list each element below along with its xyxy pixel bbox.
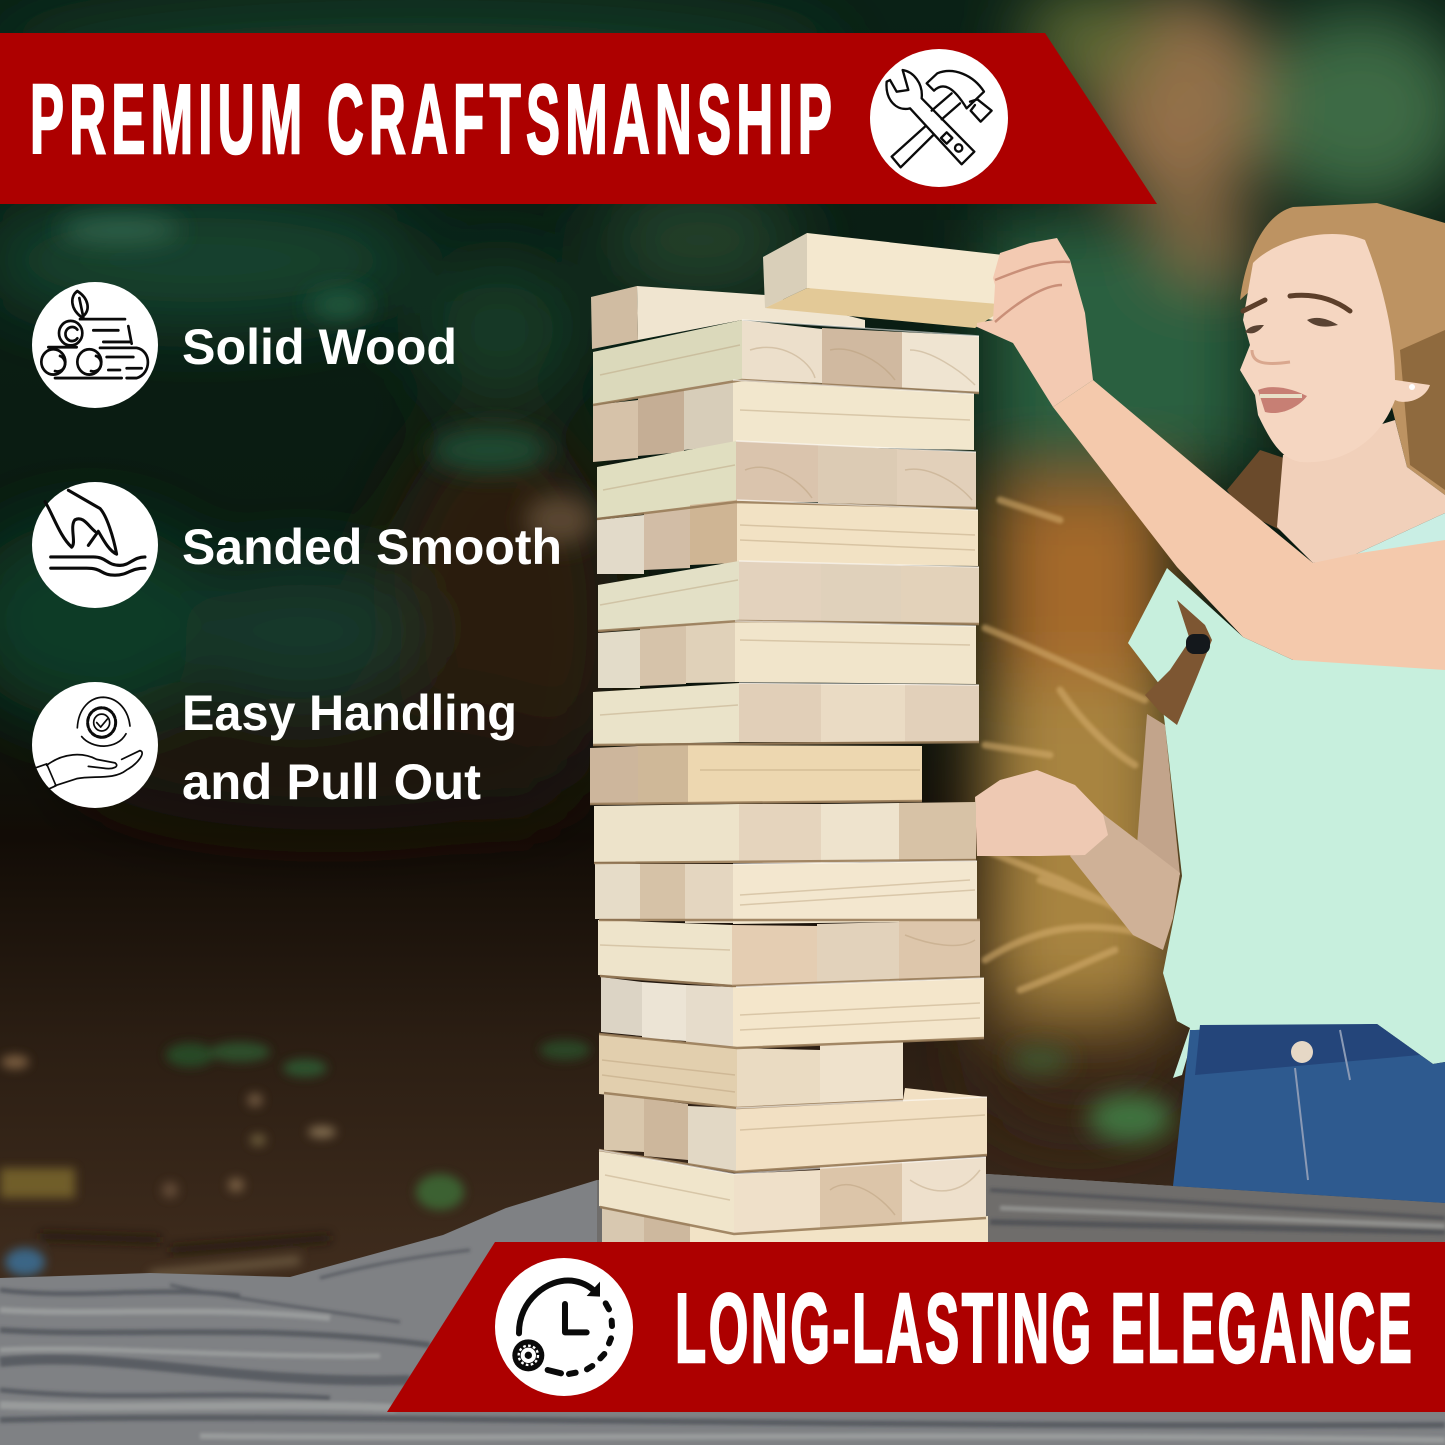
long hair xyxy=(1240,203,1445,495)
hair tie xyxy=(1186,634,1210,654)
bottom banner xyxy=(387,1242,1445,1412)
label: easy handling and pull out xyxy=(182,685,517,810)
icon: clock cycle xyxy=(495,1258,633,1396)
row 5 xyxy=(598,561,739,631)
rear arm xyxy=(1137,714,1180,875)
mint shirt xyxy=(1128,568,1445,1078)
top back block xyxy=(637,286,865,340)
girl xyxy=(975,203,1445,1203)
icon: hand with gear xyxy=(37,697,142,789)
title: PREMIUM CRAFTSMANSHIP xyxy=(30,64,832,174)
lower hand xyxy=(975,770,1108,856)
row 9 xyxy=(594,804,739,863)
row 8 xyxy=(590,746,638,804)
row 2 xyxy=(593,400,638,462)
label: easy handling and pull out: Easy Handling xyxy=(182,685,517,741)
held block xyxy=(763,233,1030,328)
wooden block tower xyxy=(590,233,1030,1245)
row 14 xyxy=(604,1092,644,1152)
row 13 xyxy=(599,1034,737,1108)
bottom title: LONG-LASTING ELEGANCE xyxy=(675,1273,1412,1383)
feature: solid wood xyxy=(32,282,457,408)
row 15 xyxy=(599,1150,734,1234)
row seams xyxy=(590,380,987,1234)
label: sanded smooth: Sanded Smooth xyxy=(182,519,562,575)
facial features xyxy=(1243,295,1415,413)
row 7 xyxy=(593,683,739,745)
icon: hand on surface xyxy=(45,490,145,575)
raised hand gripping block xyxy=(977,238,1093,407)
icon: tools xyxy=(870,49,1008,187)
row 16 xyxy=(602,1208,988,1245)
row 4 xyxy=(597,515,644,574)
row 12 xyxy=(601,977,642,1036)
jeans xyxy=(1173,1024,1445,1203)
lower forearm xyxy=(1070,814,1180,950)
row 1 xyxy=(593,320,742,405)
neck xyxy=(1277,420,1445,563)
label: easy handling and pull out: and Pull Out xyxy=(182,754,481,810)
top banner xyxy=(0,33,1157,204)
raised arm xyxy=(1053,380,1445,670)
feature: easy handling xyxy=(32,682,517,810)
face xyxy=(1240,234,1430,462)
braid xyxy=(1145,600,1212,725)
row 10 xyxy=(595,863,640,919)
wood grain xyxy=(600,345,985,1215)
row 11 xyxy=(598,920,732,985)
icon: logs xyxy=(41,291,148,378)
golden twigs xyxy=(985,500,1160,990)
wooden table xyxy=(0,1174,1445,1445)
row 3 xyxy=(597,441,736,518)
ground specks xyxy=(0,1040,590,1276)
feature: sanded smooth xyxy=(32,482,562,608)
label: solid wood: Solid Wood xyxy=(182,319,457,375)
row 6 xyxy=(598,630,640,688)
